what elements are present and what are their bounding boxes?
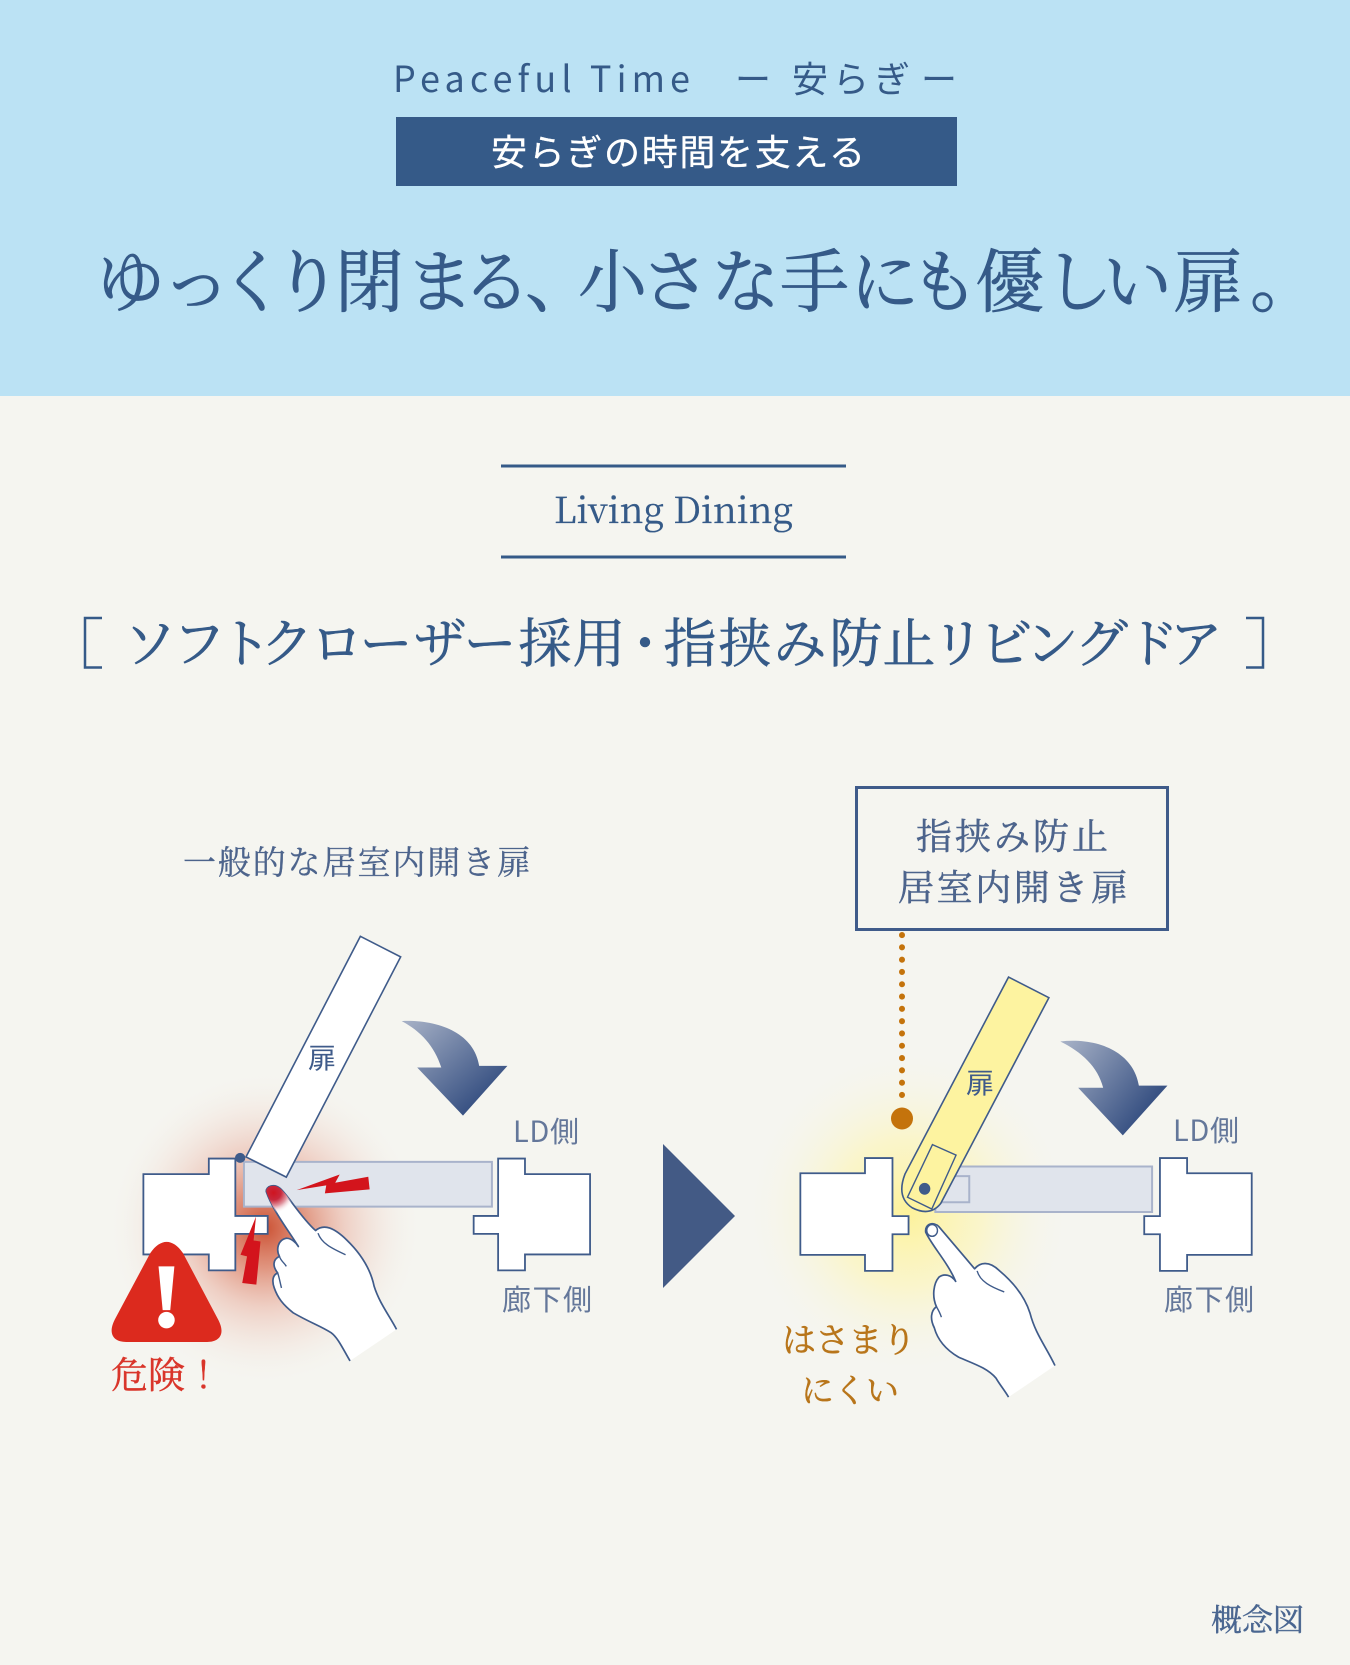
label: danger: 危険！ [111, 1345, 222, 1399]
icon: hand with pinched finger [265, 1184, 398, 1362]
callout box: 指挟み防止 [916, 809, 1108, 860]
panel: common door (danger) [107, 936, 592, 1399]
red danger glow [107, 1070, 423, 1386]
label: LD side: LD側 [1173, 1108, 1239, 1150]
panel: finger-safe door [743, 788, 1254, 1412]
eyebrow: Peaceful Time: ー [735, 51, 771, 103]
callout box: 居室内開き扉 [898, 860, 1127, 911]
section title with brackets: ソフトクローザー採用・指挟み防止リビングドア [124, 602, 1222, 678]
icon: lightning bolts [241, 1174, 370, 1285]
main headline: ゆっくり閉まる、小さな手にも優しい扉。 [96, 227, 1319, 326]
door label: 扉 [308, 1037, 336, 1077]
label: LD side: LD側 [513, 1109, 579, 1151]
eyebrow: Peaceful Time [393, 51, 957, 103]
label: hard to pinch: はさまり [782, 1313, 916, 1362]
door label: 扉 [966, 1062, 994, 1102]
eyebrow: Peaceful Time: Peaceful Time [393, 51, 690, 103]
label: hard to pinch: にくい [801, 1365, 899, 1412]
header band [0, 0, 1350, 396]
label: corridor side: 廊下側 [1164, 1277, 1254, 1319]
eyebrow: Peaceful Time: 安らぎ [792, 51, 910, 103]
label: corridor side: 廊下側 [502, 1277, 592, 1319]
label: hard to pinch [782, 1313, 916, 1412]
eyebrow: Peaceful Time: ー [921, 51, 957, 103]
icon: hand safe [926, 1224, 1055, 1397]
note: conceptual diagram: 概念図 [1211, 1595, 1304, 1640]
icon: warning triangle [112, 1242, 222, 1342]
diagram: left door frame and closed door [143, 936, 590, 1270]
callout box [856, 788, 1168, 930]
dotted leader [891, 935, 913, 1130]
section label: Living Dining: Living Dining [554, 483, 793, 534]
icon: closing arrow [1060, 1041, 1167, 1135]
icon: closing arrow [402, 1021, 507, 1116]
left heading: 一般的な居室内開き扉 [183, 837, 530, 884]
banner: 安らぎの時間を支える: 安らぎの時間を支える [491, 124, 865, 176]
arrow: before to after [663, 1144, 735, 1288]
banner: 安らぎの時間を支える [396, 117, 957, 186]
diagram: right door frame and closed door [800, 977, 1252, 1271]
yellow safe glow [743, 1047, 1073, 1377]
